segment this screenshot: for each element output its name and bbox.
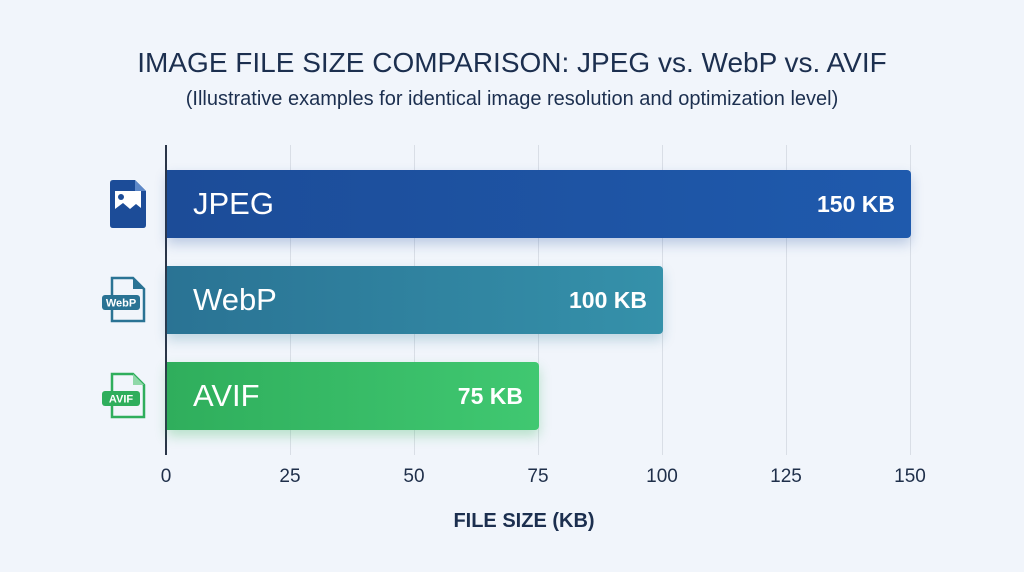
chart: 25 [279,466,301,487]
bar: AVIF: 75 KB [458,383,523,409]
chart: 0 [161,466,171,487]
bar: JPEG [167,170,911,238]
title: IMAGE FILE SIZE COMPARISON: JPEG vs. WebP vs. AVIF [137,47,887,78]
bar: JPEG: 150 KB [817,191,895,217]
icon: WebP file: WebP [106,298,136,310]
bar: JPEG: JPEG [193,186,274,221]
tick labels [161,466,926,487]
bar: WebP: WebP [193,282,277,317]
chart: 75 [527,466,549,487]
icon: AVIF file [102,372,146,418]
chart: 100 [646,466,678,487]
axis title: FILE SIZE (KB) [453,510,595,532]
bar: WebP [167,266,663,334]
subtitle: (Illustrative examples for identical image resolution and optimization level) [186,88,838,110]
chart: 125 [770,466,802,487]
icon: WebP file [102,276,146,322]
chart: 50 [403,466,425,487]
bar: AVIF [167,362,539,430]
icon: AVIF file: AVIF [109,394,133,406]
icon: JPEG image [110,180,146,228]
bar: AVIF: AVIF [193,378,260,413]
bar: WebP: 100 KB [569,287,647,313]
chart: 150 [894,466,926,487]
